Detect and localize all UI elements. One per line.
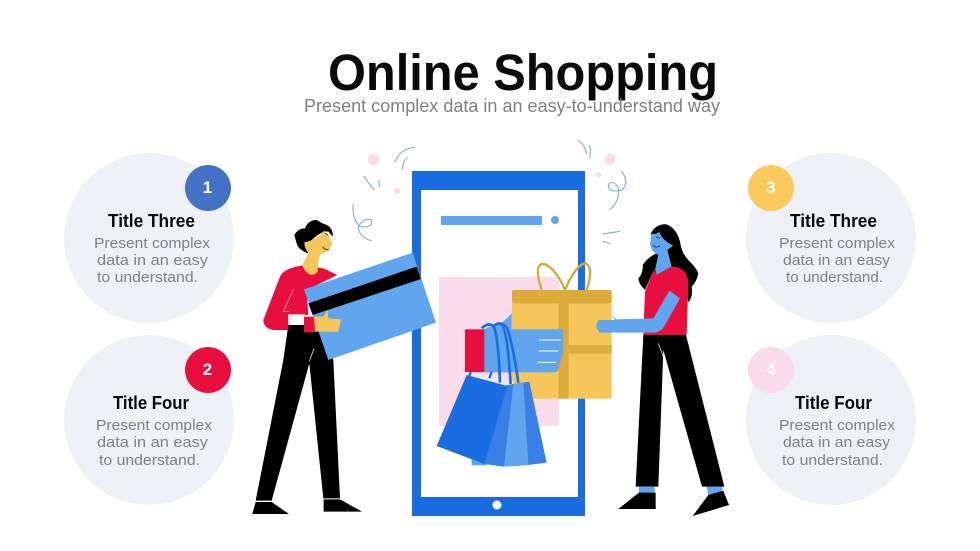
panel: item 2 [64,335,234,505]
text block: item 2 [96,417,213,469]
text block: item 2: to understand. [99,452,200,469]
text block: item 3: to understand. [786,269,883,286]
woman arm [596,291,680,333]
badge 1: 1 [203,178,212,197]
text block: item 1: data in an easy [97,252,209,269]
text block: item 4: to understand. [782,452,883,469]
badge 2 [185,347,231,393]
text block: item 3: Present complex [779,235,896,252]
badge 2: 2 [203,360,212,379]
badge 1 [185,165,231,211]
figure: man with card [252,220,436,514]
icon: gift and hand [483,263,612,399]
panel: item 1 [64,153,234,323]
subtitle: Present complex data in an easy-to-understand way [304,96,720,116]
badge 4: 4 [766,360,776,379]
panel: item 3 [746,153,916,323]
icon: confetti right [578,140,626,244]
text block: item 3 [779,235,896,286]
woman hair [638,224,698,302]
badge 4 [748,347,794,393]
badge 3: 3 [766,178,776,197]
text block: item 2: data in an easy [97,434,209,451]
figure: woman with gift [596,224,729,516]
icon: shopping bags [437,323,547,467]
text block: item 1: Present complex [94,235,211,252]
text block: item 4: Present complex [779,417,896,434]
text block: item 3: data in an easy [783,252,891,269]
text block: item 4 [779,417,896,469]
heading: item 1: Title Three [108,211,195,231]
badge 3 [748,165,794,211]
woman head and shirt [643,232,688,335]
man head [294,220,333,275]
text block: item 1: to understand. [97,269,198,286]
heading: item 2: Title Four [113,393,189,413]
text block: item 2: Present complex [96,417,213,434]
icon: phone [412,171,585,516]
icon: credit card [304,253,436,360]
icon: confetti left [353,147,415,241]
text block: item 1 [94,235,211,286]
title: Online Shopping [328,44,718,101]
heading: item 4: Title Four [795,393,872,413]
text block: item 4: data in an easy [783,434,891,451]
panel: item 4 [746,335,916,505]
heading: item 3: Title Three [790,211,877,231]
